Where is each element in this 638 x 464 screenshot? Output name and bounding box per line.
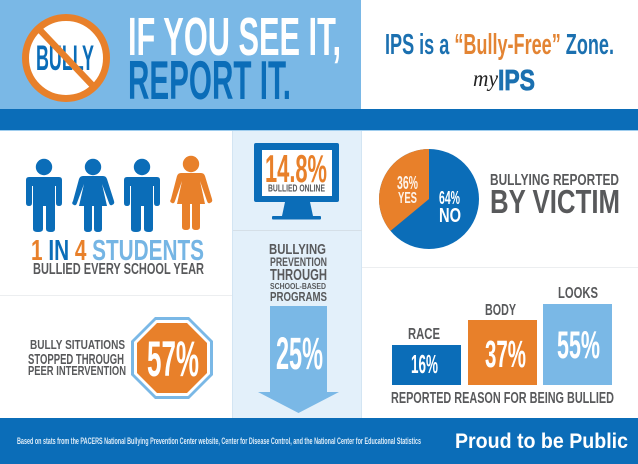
icon: stop sign with 57%: [131, 317, 213, 399]
stat: 14.8%: 14.8%: [265, 148, 327, 191]
heading: if you see it: IF YOU SEE IT,: [128, 7, 341, 67]
icon: monitor: [254, 143, 339, 220]
pie chart: NO: [439, 205, 461, 227]
pie chart: YES: [398, 190, 417, 207]
caption: bully situations: STOPPED THROUGH: [28, 352, 124, 368]
panel: bullied online monitor: [254, 143, 339, 220]
panel: 1 in 4 students: [26, 156, 212, 278]
icon: stop sign with 57%: 57%: [147, 331, 199, 387]
bar: race: 16%: [411, 349, 438, 379]
icon: no bully sign: [26, 18, 106, 98]
slogan: Proud to be Public: [455, 430, 628, 453]
panel: header title: [0, 0, 361, 111]
bar: body: 37%: [485, 334, 526, 376]
bar: race: [392, 326, 461, 385]
panel: peer intervention: [28, 317, 213, 399]
panel: school-based programs: [258, 242, 339, 413]
logo: myIPS: [473, 65, 535, 97]
caption: prevention programs: [269, 242, 327, 304]
bar: race: RACE: [408, 326, 440, 343]
pie chart: 36%: [397, 172, 418, 193]
panel: footer: [0, 418, 638, 464]
caption: prevention programs: THROUGH: [270, 267, 327, 284]
stat: 1 in 4 students: 1 IN 4 STUDENTS: [31, 235, 204, 267]
caption: bully situations: PEER INTERVENTION: [28, 363, 126, 378]
logo: myIPS: IPS: [498, 65, 535, 97]
caption: prevention programs: PROGRAMS: [270, 289, 327, 304]
pie chart: 64%: [439, 188, 460, 208]
panel: reported by victim: [379, 149, 620, 249]
bar: body: BODY: [485, 302, 516, 319]
panel: reasons bar chart: [391, 285, 614, 407]
bar: looks: [543, 285, 612, 385]
panel: bully-free zone: [385, 29, 614, 97]
caption: bully situations: BULLY SITUATIONS: [30, 338, 125, 352]
icon: no bully sign: BULLY: [36, 39, 94, 78]
caption: prevention programs: SCHOOL-BASED: [270, 281, 326, 291]
bar: looks: 55%: [557, 324, 600, 367]
caption: bullied online: BULLIED ONLINE: [268, 184, 325, 194]
icon: four students: [26, 156, 212, 232]
arrow: down 25%: [258, 306, 339, 413]
logo: myIPS: my: [473, 66, 499, 91]
bar: body: [468, 302, 537, 385]
caption: prevention programs: BULLYING: [269, 242, 326, 258]
caption: prevention programs: PREVENTION: [270, 255, 327, 269]
caption: bully situations: [28, 338, 126, 378]
arrow: down 25%: 25%: [276, 328, 323, 379]
caption: bullied every school year: BULLIED EVERY SCHOOL YEAR: [33, 261, 204, 278]
blue band: [0, 109, 638, 130]
pie chart: [379, 149, 479, 249]
heading: report it: REPORT IT.: [128, 49, 291, 111]
bar: looks: LOOKS: [558, 285, 598, 302]
panel: middle column background: [233, 131, 362, 418]
